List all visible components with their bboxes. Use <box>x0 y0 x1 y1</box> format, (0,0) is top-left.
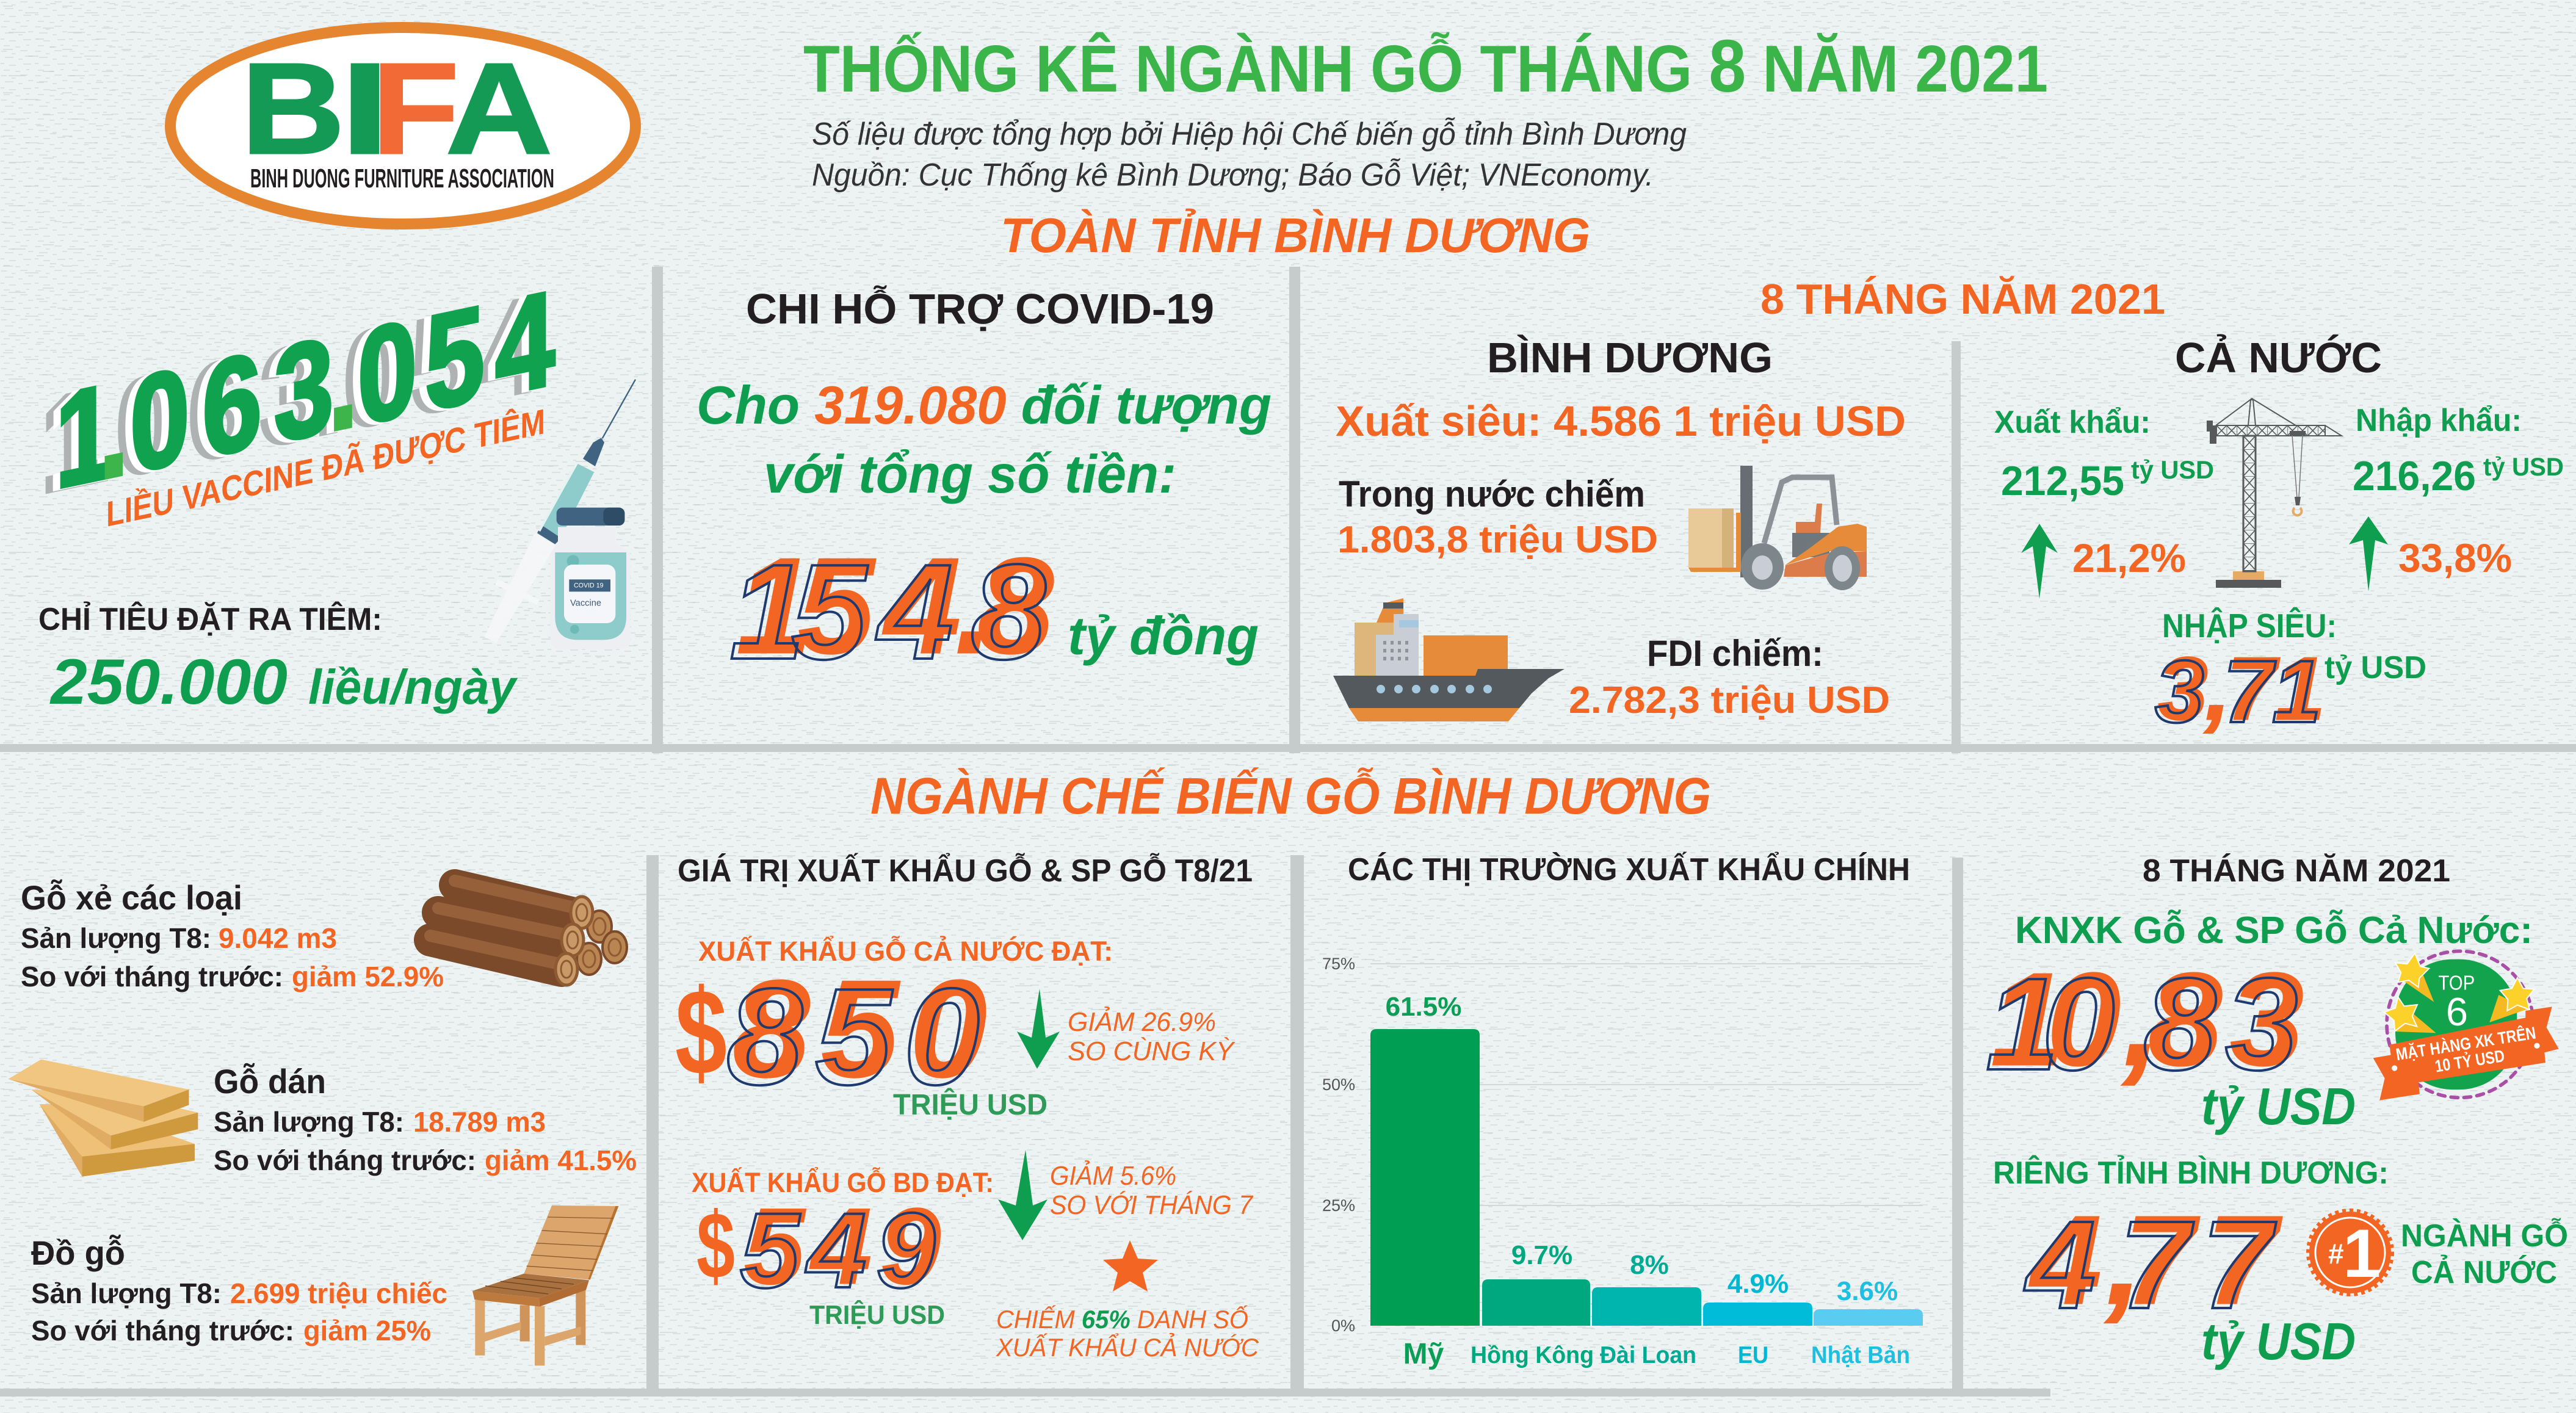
share note: CHIẾM 65% DANH SỐ <box>996 1304 1248 1334</box>
logo: BIFA: F <box>372 36 459 181</box>
national label: KNXK Gỗ & SP Gỗ Cả Nước: <box>2015 909 2533 952</box>
value 549: 549 <box>745 1187 940 1306</box>
trade surplus: Xuất siêu: 4.586 1 triệu USD <box>1336 397 1906 445</box>
unit: tỷ USD <box>2201 1313 2356 1371</box>
seal: number 1 <box>2308 1210 2392 1295</box>
plywood <box>214 1062 637 1176</box>
panel: export markets <box>1322 851 1923 1370</box>
logo: BIFA: A <box>446 36 552 181</box>
plywood: giảm 41.5% <box>485 1144 637 1176</box>
furniture: Sản lượng T8: <box>31 1277 222 1309</box>
heading: 8 THÁNG NĂM 2021 <box>1760 275 2165 323</box>
furniture: 2.699 triệu chiếc <box>230 1277 447 1309</box>
unit: tỷ USD <box>2201 1078 2356 1136</box>
seal caption: NGÀNH GỖ <box>2401 1218 2568 1254</box>
furniture: giảm 25% <box>303 1315 431 1346</box>
panel: export value <box>675 853 1259 1362</box>
bar chart: Đài Loan <box>1600 1342 1696 1368</box>
change note: GIẢM 26.9% <box>1068 1006 1216 1037</box>
big number: 154.8: 154.8 <box>737 530 1054 682</box>
deficit value: 371 <box>2155 642 2321 741</box>
icon: container ship <box>1333 598 1565 721</box>
seal: number 1: 1 <box>2343 1215 2381 1292</box>
panel: 8 months trade <box>1333 275 2165 721</box>
big number: doses: 1.063.054 <box>48 264 548 519</box>
icon: crane <box>2207 399 2342 588</box>
province label: RIÊNG TỈNH BÌNH DƯƠNG: <box>1993 1155 2389 1191</box>
bar chart: 25% <box>1322 1196 1355 1215</box>
seal caption: CẢ NƯỚC <box>2411 1254 2557 1290</box>
unit: TRIỆU USD <box>893 1088 1047 1121</box>
arrow up: export <box>2021 524 2058 599</box>
icon: chair <box>472 1205 618 1365</box>
FDI value: 2.782,3 triệu USD <box>1569 679 1890 721</box>
plywood: 18.789 m3 <box>413 1106 546 1138</box>
value 4,77: 4,77 <box>2029 1190 2282 1330</box>
unit: tỷ đồng <box>1068 605 1259 666</box>
icon: logs <box>430 881 627 985</box>
panel: products <box>8 878 637 1365</box>
deficit unit: tỷ USD <box>2325 650 2426 685</box>
icon: syringe and vial: Vaccine <box>570 599 601 609</box>
bar chart: 8% <box>1630 1250 1669 1280</box>
panel: vaccine <box>38 262 635 718</box>
sawn timber: 9.042 m3 <box>219 922 337 954</box>
badge: top 6: TOP <box>2438 972 2475 995</box>
unit BD: TRIỆU USD <box>809 1299 945 1330</box>
BD label: XUẤT KHẨU GỖ BD ĐẠT: <box>692 1167 994 1198</box>
export growth: 21,2% <box>2072 535 2186 580</box>
furniture: So với tháng trước: <box>31 1315 294 1346</box>
sawn timber: Sản lượng T8: <box>21 922 211 954</box>
export label: Xuất khẩu: <box>1994 405 2151 440</box>
change note BD: SO VỚI THÁNG 7 <box>1050 1190 1253 1220</box>
section heading: province: TOÀN TỈNH BÌNH DƯƠNG <box>1000 208 1590 262</box>
domestic value: 1.803,8 triệu USD <box>1337 519 1658 561</box>
plywood: Gỗ dán <box>214 1062 326 1100</box>
change note BD: GIẢM 5.6% <box>1050 1160 1176 1191</box>
furniture <box>31 1234 447 1346</box>
value 850: 850 <box>726 959 980 1113</box>
value 549: 549 <box>740 1191 935 1310</box>
section heading: wood industry: NGÀNH CHẾ BIẾN GỖ BÌNH DƯƠNG <box>870 767 1711 825</box>
bar chart: EU <box>1738 1342 1768 1368</box>
plywood: Sản lượng T8: <box>214 1106 404 1138</box>
bar chart: 0% <box>1331 1317 1355 1335</box>
sawn timber: Gỗ xẻ các loại <box>21 878 242 917</box>
arrow down BD <box>998 1150 1047 1240</box>
import value: 216,26 <box>2353 453 2476 499</box>
seal: number 1: # <box>2328 1238 2344 1270</box>
value 10,83: 1083 <box>1986 950 2298 1097</box>
heading: CẢ NƯỚC <box>2175 334 2382 381</box>
bar chart: Hồng Kông <box>1471 1342 1594 1368</box>
bar chart: Nhật Bản <box>1811 1342 1910 1368</box>
star icon <box>1103 1240 1158 1292</box>
value 10,83: 10,83 <box>1991 945 2304 1093</box>
bar chart: 3.6% <box>1837 1276 1898 1306</box>
value 4,77: 477 <box>2024 1195 2277 1335</box>
share note: XUẤT KHẨU CẢ NƯỚC <box>996 1332 1259 1362</box>
export unit: tỷ USD <box>2131 455 2214 484</box>
icon: syringe and vial <box>484 380 635 649</box>
badge: top 6: MẶT HÀNG XK TRÊN <box>2395 1023 2537 1064</box>
domestic label: Trong nước chiếm <box>1339 474 1645 515</box>
dollar sign BD: $ <box>696 1193 735 1298</box>
deficit label: NHẬP SIÊU: <box>2162 607 2337 645</box>
target unit: liều/ngày <box>308 660 518 714</box>
heading: CHI HỖ TRỢ COVID-19 <box>746 284 1214 333</box>
bar chart: 61.5% <box>1386 992 1461 1022</box>
logo: BIFA <box>170 27 635 224</box>
change note: SO CÙNG KỲ <box>1068 1036 1236 1066</box>
rotated caption: LIỀU VACCINE ĐÃ ĐƯỢC TIÊM <box>106 400 545 535</box>
big number: doses: 1.063.054 <box>55 262 555 517</box>
change note BD <box>1050 1160 1253 1220</box>
FDI label: FDI chiếm: <box>1647 633 1823 674</box>
panel: 8 months wood exports <box>1986 853 2568 1371</box>
sawn timber: giảm 52.9% <box>292 961 444 992</box>
import unit: tỷ USD <box>2483 452 2564 481</box>
heading: CÁC THỊ TRƯỜNG XUẤT KHẨU CHÍNH <box>1348 851 1910 887</box>
dollar sign: $ <box>675 964 727 1100</box>
dividers <box>0 267 2576 1397</box>
main title: THỐNG KÊ NGÀNH GỖ THÁNG 8 NĂM 2021 <box>803 24 2048 107</box>
source line 1: Số liệu được tổng hợp bởi Hiệp hội Chế biến gỗ tỉnh Bình Dương <box>812 117 1687 152</box>
big number: doses: 1.063.054 <box>40 267 540 522</box>
logo: BIFA: BINH DUONG FURNITURE ASSOCIATION <box>250 164 554 193</box>
export value: 212,55 <box>2001 458 2124 504</box>
seal caption <box>2401 1218 2568 1290</box>
panel: covid support <box>696 284 1272 688</box>
bar chart <box>1322 955 1923 1370</box>
icon: forklift <box>1688 466 1867 590</box>
badge: top 6: 6 <box>2446 989 2468 1034</box>
arrow down <box>1017 989 1060 1069</box>
import growth: 33,8% <box>2398 535 2512 580</box>
national label: XUẤT KHẨU GỖ CẢ NƯỚC ĐẠT: <box>698 936 1113 967</box>
logo: BIFA: B <box>241 36 345 181</box>
plywood: So với tháng trước: <box>214 1144 476 1176</box>
import label: Nhập khẩu: <box>2356 403 2522 438</box>
badge: top 6 <box>2373 951 2559 1100</box>
heading: GIÁ TRỊ XUẤT KHẨU GỖ & SP GỖ T8/21 <box>678 853 1253 889</box>
bar chart: 9.7% <box>1511 1240 1572 1270</box>
deficit value: 3,71 <box>2158 639 2325 738</box>
bar chart: 75% <box>1322 955 1355 973</box>
source line 2: Nguồn: Cục Thống kê Bình Dương; Báo Gỗ Việt; VNEconomy. <box>812 157 1654 193</box>
icon: syringe and vial: COVID 19 <box>574 582 604 590</box>
icon: planks <box>8 1060 198 1177</box>
line 1: Cho 319.080 đối tượng <box>696 375 1272 435</box>
panel: national trade <box>1994 334 2564 741</box>
big number: 154.8: 1548 <box>729 537 1046 688</box>
furniture: Đồ gỗ <box>31 1234 125 1272</box>
bar chart: 4.9% <box>1728 1269 1789 1299</box>
target value: 250.000 <box>49 646 288 718</box>
sub heading: Binh Duong: BÌNH DƯƠNG <box>1487 334 1773 381</box>
target label: CHỈ TIÊU ĐẶT RA TIÊM: <box>38 601 382 637</box>
line 2: với tổng số tiền: <box>764 444 1176 504</box>
badge: top 6: 10 TỶ USD <box>2434 1046 2506 1076</box>
logo: BIFA: I <box>340 36 390 181</box>
heading: 8 THÁNG NĂM 2021 <box>2143 853 2450 889</box>
bar chart: Mỹ <box>1403 1338 1444 1370</box>
arrow up: import <box>2349 516 2388 591</box>
sawn timber: So với tháng trước: <box>21 961 283 992</box>
change note <box>1068 1006 1236 1066</box>
share note <box>996 1304 1259 1362</box>
value 850: 850 <box>733 952 986 1105</box>
bar chart: 50% <box>1322 1075 1355 1094</box>
sawn timber <box>21 878 444 992</box>
